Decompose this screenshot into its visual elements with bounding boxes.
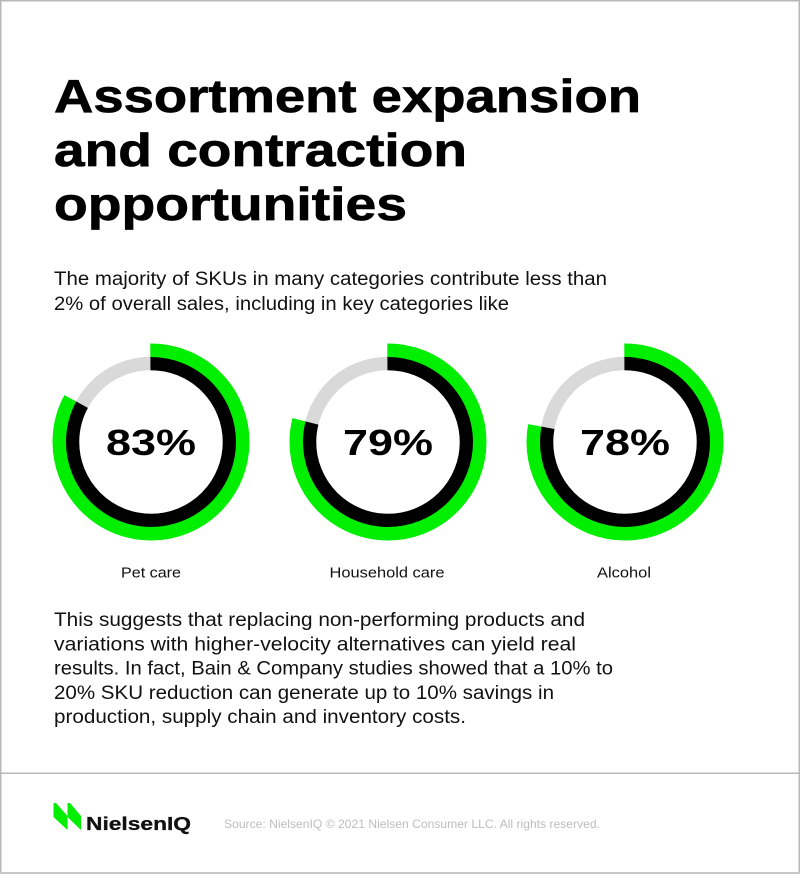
icon: logo mark <box>54 803 81 830</box>
donut: household care 79% <box>296 350 480 582</box>
donut: alcohol 78%: 78% <box>580 422 670 463</box>
title: Assortment expansion <box>54 70 641 122</box>
title <box>54 70 641 230</box>
donut: pet care 83% <box>59 350 243 582</box>
donut: pet care 83%: 83% <box>106 422 196 463</box>
body paragraph: 20% SKU reduction can generate up to 10% savings in <box>54 683 554 704</box>
body paragraph: variations with higher-velocity alternatives can yield real <box>54 634 576 656</box>
body paragraph: results. In fact, Bain & Company studies showed that a 10% to <box>54 658 613 680</box>
intro text: The majority of SKUs in many categories contribute less than <box>54 269 607 290</box>
donut: alcohol 78%: Alcohol <box>597 564 651 582</box>
source line: Source: NielsenIQ © 2021 Nielsen Consumer LLC. All rights reserved. <box>224 817 600 831</box>
body paragraph: This suggests that replacing non-performing products and <box>54 610 585 631</box>
donut: alcohol 78% <box>533 350 717 582</box>
title: and contraction <box>54 124 467 176</box>
intro text <box>54 269 607 315</box>
donut: household care 79%: 79% <box>343 422 433 463</box>
donut: pet care 83%: Pet care <box>121 564 181 582</box>
logo: NielsenIQ <box>54 803 191 834</box>
intro text: 2% of overall sales, including in key categories like <box>54 294 509 315</box>
title: opportunities <box>54 178 407 230</box>
body paragraph: production, supply chain and inventory costs. <box>54 707 466 728</box>
donut: household care 79%: Household care <box>330 564 444 582</box>
body paragraph <box>54 610 613 728</box>
logo: NielsenIQ: NielsenIQ <box>86 814 191 834</box>
